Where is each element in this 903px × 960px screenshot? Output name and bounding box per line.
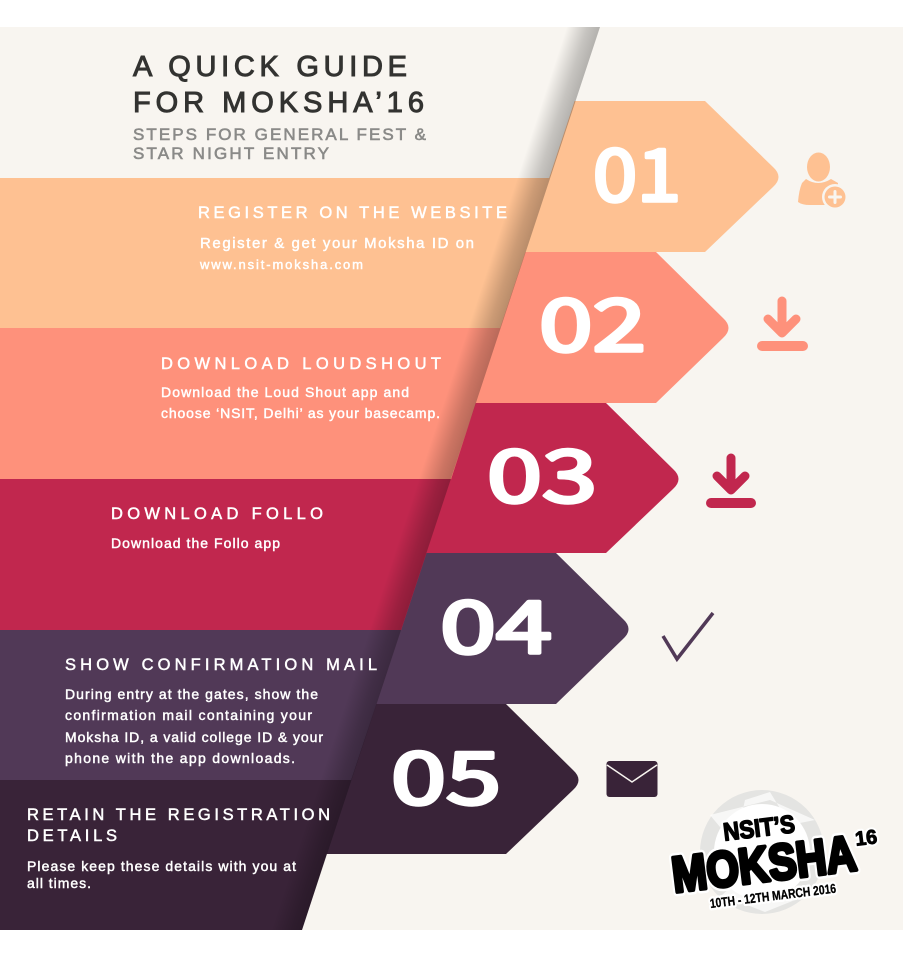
band 05 [0, 780, 351, 930]
logo badge [700, 790, 824, 914]
band 02 [0, 328, 500, 480]
step 4 text: confirmation mail containing your [65, 707, 312, 723]
icon: download 02 [762, 301, 803, 346]
icon: add user [798, 152, 848, 210]
logo wordmark halo: 10TH - 12TH MARCH 2016 [709, 881, 837, 911]
step 4 text [65, 656, 377, 766]
step 5 text: DETAILS [27, 827, 117, 845]
arrow 01 [526, 101, 778, 252]
step 1 text: www.nsit-moksha.com [199, 257, 363, 272]
logo wordmark halo: 16 [854, 826, 878, 851]
step 1 text: REGISTER ON THE WEBSITE [198, 204, 507, 222]
subtitle: STAR NIGHT ENTRY [133, 144, 329, 163]
logo wordmark: 16 [854, 826, 878, 851]
step 2 text: Download the Loud Shout app and [161, 384, 409, 400]
logo wordmark halo [666, 800, 884, 915]
numeral 04: 04 [440, 569, 552, 674]
fold shadow [242, 27, 600, 930]
arrow 05 [326, 704, 578, 854]
step 2 text [161, 355, 441, 421]
colour bands [0, 178, 550, 930]
step 3 text [111, 505, 323, 551]
icon: download 03 [711, 458, 751, 503]
icon: envelope [606, 761, 658, 797]
logo [666, 790, 884, 915]
title: A QUICK GUIDE [133, 51, 407, 83]
logo wordmark: NSIT’S [722, 810, 797, 847]
numeral 01: 01 [593, 117, 681, 222]
step 2 text: DOWNLOAD LOUDSHOUT [161, 355, 441, 373]
step 1 text: Register & get your Moksha ID on [200, 235, 474, 252]
step 2 text: choose ‘NSIT, Delhi’ as your basecamp. [161, 405, 440, 421]
step 3 text: Download the Follo app [111, 535, 280, 551]
step 4 text: SHOW CONFIRMATION MAIL [65, 656, 377, 674]
arrow 02 [476, 252, 728, 403]
step arrows [326, 101, 778, 854]
logo wordmark: MOKSHA [669, 825, 859, 903]
title [133, 51, 424, 119]
step 5 text: RETAIN THE REGISTRATION [27, 806, 330, 824]
numeral 05: 05 [391, 720, 501, 825]
band 04 [0, 630, 401, 780]
subtitle: STEPS FOR GENERAL FEST & [133, 125, 427, 144]
logo wordmark halo: MOKSHA [669, 825, 859, 903]
icon: check mark [663, 613, 713, 659]
numeral 02: 02 [539, 267, 646, 372]
logo wordmark [666, 800, 884, 915]
arrow 04 [376, 553, 628, 704]
step 3 text: DOWNLOAD FOLLO [111, 505, 323, 523]
logo wordmark: 10TH - 12TH MARCH 2016 [709, 881, 837, 911]
numeral 03: 03 [487, 418, 597, 523]
step 1 text [198, 204, 507, 272]
band 01 [0, 178, 550, 328]
step 5 text: Please keep these details with you at [27, 858, 296, 874]
step 5 text: all times. [27, 875, 91, 891]
band 03 [0, 479, 451, 630]
step 4 text: phone with the app downloads. [65, 750, 295, 766]
step 4 text: Moksha ID, a valid college ID & your [65, 729, 323, 745]
arrow 03 [426, 403, 678, 553]
step 5 text [27, 806, 330, 891]
subtitle [133, 125, 427, 163]
step 4 text: During entry at the gates, show the [65, 686, 318, 702]
logo wordmark halo: NSIT’S [722, 810, 797, 847]
title: FOR MOKSHA’16 [133, 87, 424, 119]
